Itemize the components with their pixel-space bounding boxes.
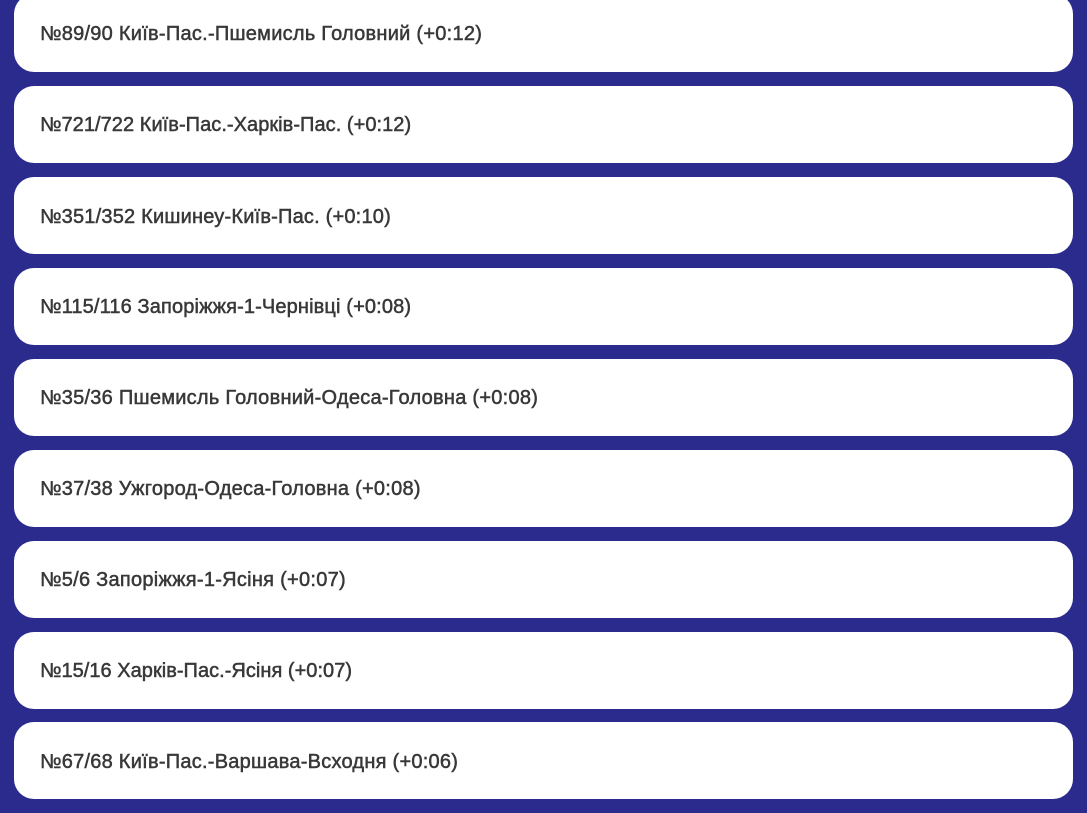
card: train 351/352: №351/352 Кишинеу-Київ-Пас. (+0:10) — [40, 206, 391, 228]
card: train 37/38: №37/38 Ужгород-Одеса-Головна (+0:08) — [40, 478, 421, 500]
card: train 35/36 — [14, 359, 1073, 436]
card: train 15/16 — [14, 632, 1073, 709]
card: train 351/352 — [14, 177, 1073, 254]
card: train 35/36: №35/36 Пшемисль Головний-Одеса-Головна (+0:08) — [40, 387, 538, 409]
card: train 721/722 — [14, 86, 1073, 163]
card: train 89/90 — [14, 0, 1073, 72]
card: train 67/68 — [14, 722, 1073, 799]
card: train 5/6: №5/6 Запоріжжя-1-Ясіня (+0:07) — [40, 569, 346, 591]
card: train 15/16: №15/16 Харків-Пас.-Ясіня (+0:07) — [40, 660, 352, 682]
card: train 67/68: №67/68 Київ-Пас.-Варшава-Всходня (+0:06) — [40, 751, 458, 773]
card: train 5/6 — [14, 541, 1073, 618]
card: train 115/116: №115/116 Запоріжжя-1-Чернівці (+0:08) — [40, 296, 411, 318]
card: train 721/722: №721/722 Київ-Пас.-Харків-Пас. (+0:12) — [40, 114, 411, 136]
card: train 89/90: №89/90 Київ-Пас.-Пшемисль Головний (+0:12) — [40, 23, 482, 45]
card: train 115/116 — [14, 268, 1073, 345]
card: train 37/38 — [14, 450, 1073, 527]
